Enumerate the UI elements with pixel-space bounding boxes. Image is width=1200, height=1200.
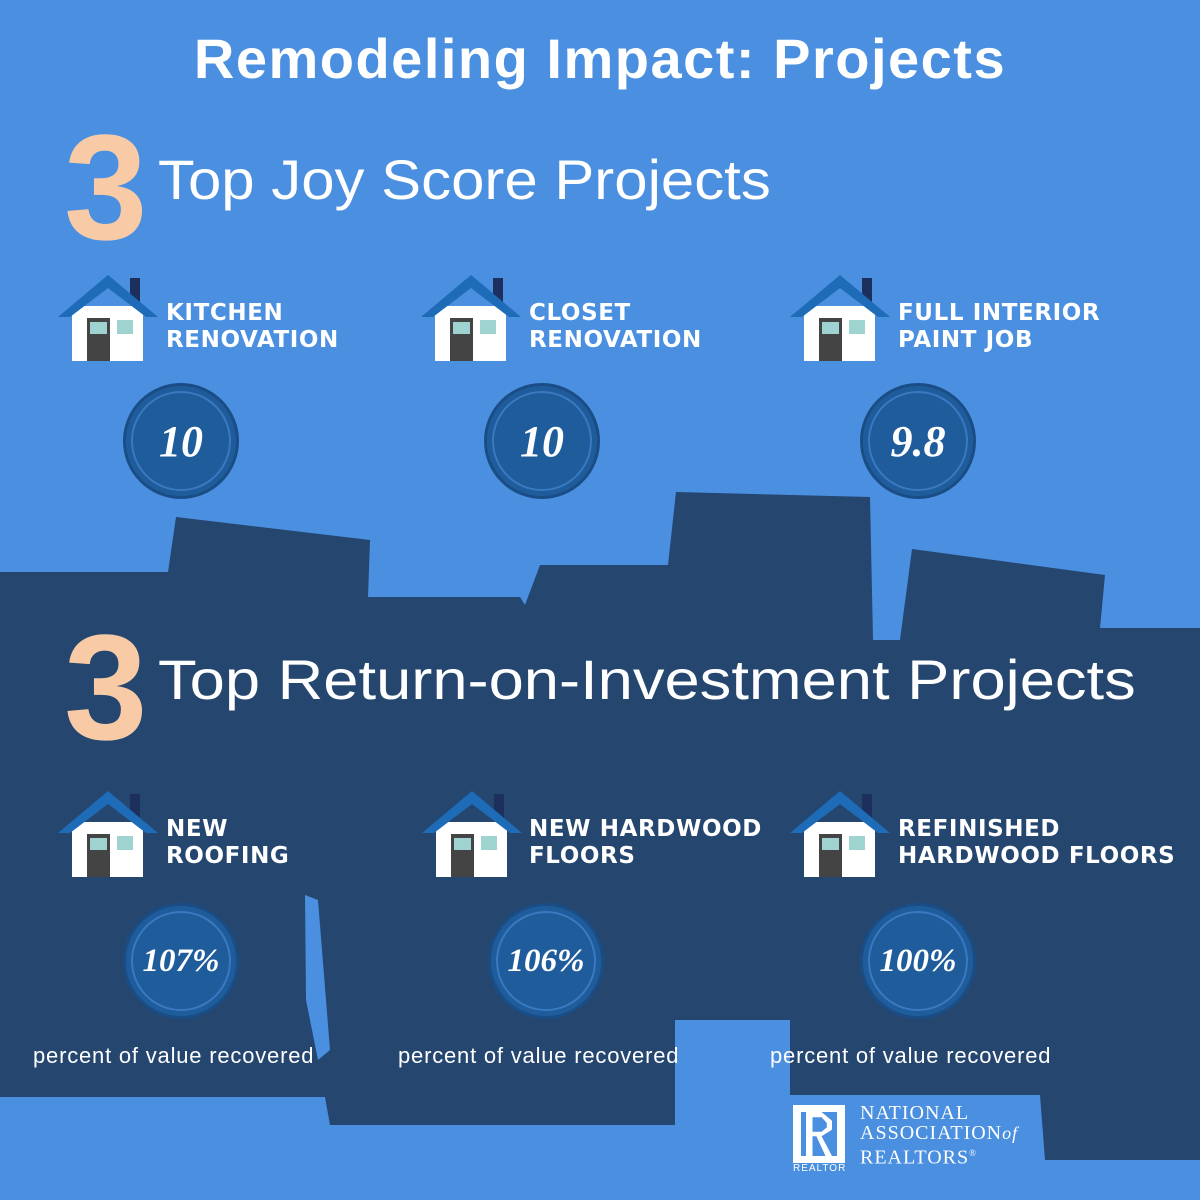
text: association name [860, 1102, 1020, 1169]
ROI circle: 100% [880, 942, 956, 978]
ROI circle: 106% [508, 942, 584, 978]
heading: joy score [64, 103, 771, 271]
item: roofing [33, 791, 314, 1068]
label [898, 300, 1100, 353]
label: FULL INTERIOR [898, 300, 1100, 326]
number 3: 3 [64, 103, 147, 271]
label [529, 300, 702, 353]
icon: R block [793, 1105, 845, 1163]
label: KITCHEN [166, 300, 283, 326]
caption: percent of value recovered [33, 1043, 314, 1068]
ROI circle: 107% [142, 942, 220, 978]
label: RENOVATION [529, 327, 702, 353]
item: closet [421, 275, 702, 499]
label [529, 816, 762, 869]
item: paint [790, 275, 1100, 499]
icon: house [422, 791, 522, 877]
ROI circle [860, 903, 976, 1019]
score circle [484, 383, 600, 499]
label [898, 816, 1175, 869]
label: HARDWOOD FLOORS [898, 843, 1175, 869]
score circle: 9.8 [890, 416, 946, 466]
icon: house [790, 791, 890, 877]
title: Remodeling Impact: Projects [194, 27, 1006, 90]
score circle: 10 [159, 416, 203, 466]
label: CLOSET [529, 300, 631, 326]
text: realtor: REALTOR [793, 1163, 846, 1174]
heading text: Top Joy Score Projects [158, 148, 771, 211]
label: RENOVATION [166, 327, 339, 353]
label: ROOFING [166, 843, 289, 869]
text: association name: ASSOCIATIONof [860, 1122, 1018, 1144]
ROI circle [488, 903, 604, 1019]
heading: ROI [64, 603, 1136, 771]
score circle [860, 383, 976, 499]
label: FLOORS [529, 843, 636, 869]
text: association name: NATIONAL [860, 1102, 969, 1124]
score circle: 10 [520, 416, 564, 466]
item: kitchen [58, 275, 339, 499]
label: REFINISHED [898, 816, 1060, 842]
label: NEW HARDWOOD [529, 816, 762, 842]
number 3: 3 [64, 603, 147, 771]
item: new hardwood [398, 791, 762, 1068]
ROI circle [123, 903, 239, 1019]
caption: percent of value recovered [770, 1043, 1051, 1068]
icon: house [58, 791, 158, 877]
label [166, 300, 339, 353]
heading text: Top Return-on-Investment Projects [158, 648, 1136, 711]
score circle [123, 383, 239, 499]
label [166, 816, 289, 869]
logo: NAR [793, 1102, 1020, 1174]
icon: house [790, 275, 890, 361]
icon: house [58, 275, 158, 361]
text: association name: REALTORS® [860, 1147, 977, 1169]
label: PAINT JOB [898, 327, 1033, 353]
item: refinished [770, 791, 1175, 1068]
label: NEW [166, 816, 228, 842]
caption: percent of value recovered [398, 1043, 679, 1068]
icon: house [421, 275, 521, 361]
